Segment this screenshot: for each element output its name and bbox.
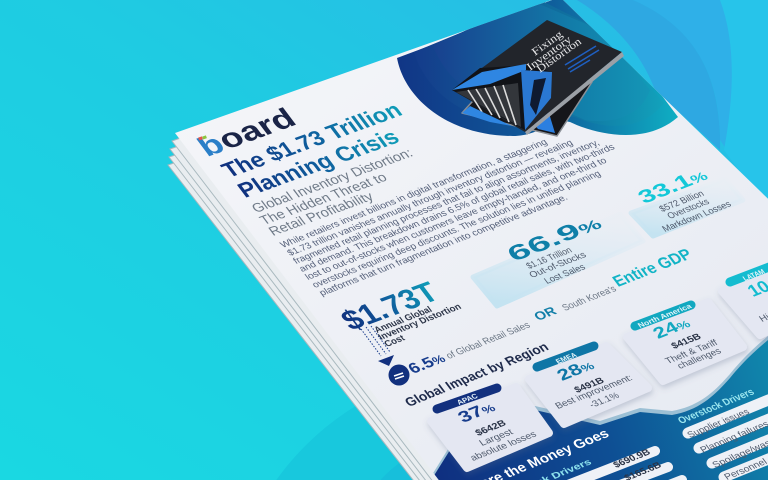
card: North America: 24%: [649, 314, 694, 342]
intro paragraph: overstocks requiring deep discounts. The solution lies in unified planning: [310, 169, 603, 290]
out-of-stock drivers list: $690.9B: [611, 447, 653, 470]
big number: $1.73T: Annual Global: [372, 305, 435, 335]
page: [175, 0, 768, 480]
card: North America: challenges: [675, 346, 724, 371]
blue header shape: [397, 0, 678, 136]
stat: 33.1%: 33.1 %: [634, 165, 713, 208]
subtitle: The Hidden Threat to: [256, 169, 390, 227]
card: APAC: 37%: [454, 398, 499, 426]
card: APAC: [431, 387, 549, 468]
stat: 66.9%: $1.16 Trillion: [524, 245, 575, 271]
intro paragraph: and demand. This breakdown drains 6.5% of global retail sales, with two-thirds: [297, 142, 617, 274]
stat: 66.9%: [473, 210, 643, 306]
title: The $1.73 Trillion: [216, 98, 407, 182]
stat: 66.9%: Out-of-Stocks: [527, 250, 589, 280]
card: North America: [627, 302, 743, 381]
heading: impact by region: Global Impact by Region: [402, 340, 551, 409]
stat: 66.9%: Lost Sales: [542, 262, 588, 286]
card: EMEA: -31.1%: [587, 390, 622, 410]
stat: 33.1%: Overstocks: [665, 197, 712, 221]
icon: equals: [388, 364, 410, 386]
card: LATAM: [722, 258, 768, 335]
stat: 66.9%: 66.9 %: [501, 210, 606, 266]
card: APAC: APAC: [455, 391, 480, 407]
card: APAC: Largest: [477, 427, 516, 448]
book title: Inventory: [525, 33, 574, 73]
big number: $1.73T: Inventory Distortion: [376, 302, 464, 342]
comparison line: South Korea's: [560, 284, 619, 313]
logo: board: board: [191, 103, 302, 163]
overstock drivers list: Overstock Drivers: [676, 386, 757, 426]
overstock drivers list: Supplier issues: [685, 407, 752, 440]
card: EMEA: Best improvement:: [553, 373, 635, 411]
card: APAC: $642B: [473, 418, 509, 438]
book title: Fixing: [530, 28, 566, 58]
intro paragraph: $1.73 trillion vanishes annually through inventory distortion — revealing: [285, 138, 575, 258]
paper stack: [168, 95, 640, 480]
comparison line: 6.5%: [405, 350, 449, 377]
book title: [525, 28, 584, 75]
bottom panel: [433, 336, 768, 480]
out-of-stock drivers list: [479, 447, 682, 480]
stat: 33.1%: [631, 165, 743, 236]
card: EMEA: EMEA: [554, 351, 579, 366]
intro paragraph: While retailers invest billions in digital transformation, a staggering: [278, 137, 550, 250]
card: North America: North America: [636, 302, 694, 330]
big number: $1.73T: Cost: [382, 333, 408, 349]
intro paragraph: platforms that turn fragmentation into competitive advantage.: [317, 193, 570, 298]
comparison line: of Global Retail Sales: [444, 320, 533, 361]
card: EMEA: 28%: [553, 356, 598, 384]
stat: 33.1%: Markdown Losses: [660, 199, 734, 234]
card: APAC: absolute losses: [468, 429, 539, 463]
card: North America: Theft & Tariff: [663, 338, 720, 366]
card: North America: $415B: [669, 332, 704, 351]
subtitle: Global Inventory Distortion:: [248, 145, 416, 215]
books mockup: [452, 20, 624, 136]
comparison line: [405, 245, 696, 377]
big number: $1.73T: $1.73T: [334, 276, 445, 337]
overstock drivers list: [676, 386, 768, 480]
intro paragraph: fragmented retail planning processes that fail to align assortments, inventory,: [291, 138, 602, 266]
book title: Distortion: [535, 35, 584, 75]
background circles: [225, 0, 768, 480]
comparison line: Entire GDP: [609, 245, 696, 290]
overstock drivers list: Planning failures: [698, 419, 768, 455]
card: EMEA: $491B: [572, 376, 607, 395]
intro paragraph: lost to out-of-stocks when customers leave empty-handed, and one-third to: [303, 156, 609, 282]
arrow: dotted down: [361, 326, 394, 366]
subtitle: Retail Profitability: [265, 189, 376, 238]
title: Planning Crisis: [232, 124, 404, 202]
stat: 33.1%: $572 Billion: [657, 189, 707, 214]
card: EMEA: [529, 346, 648, 424]
comparison line: OR: [531, 303, 560, 323]
